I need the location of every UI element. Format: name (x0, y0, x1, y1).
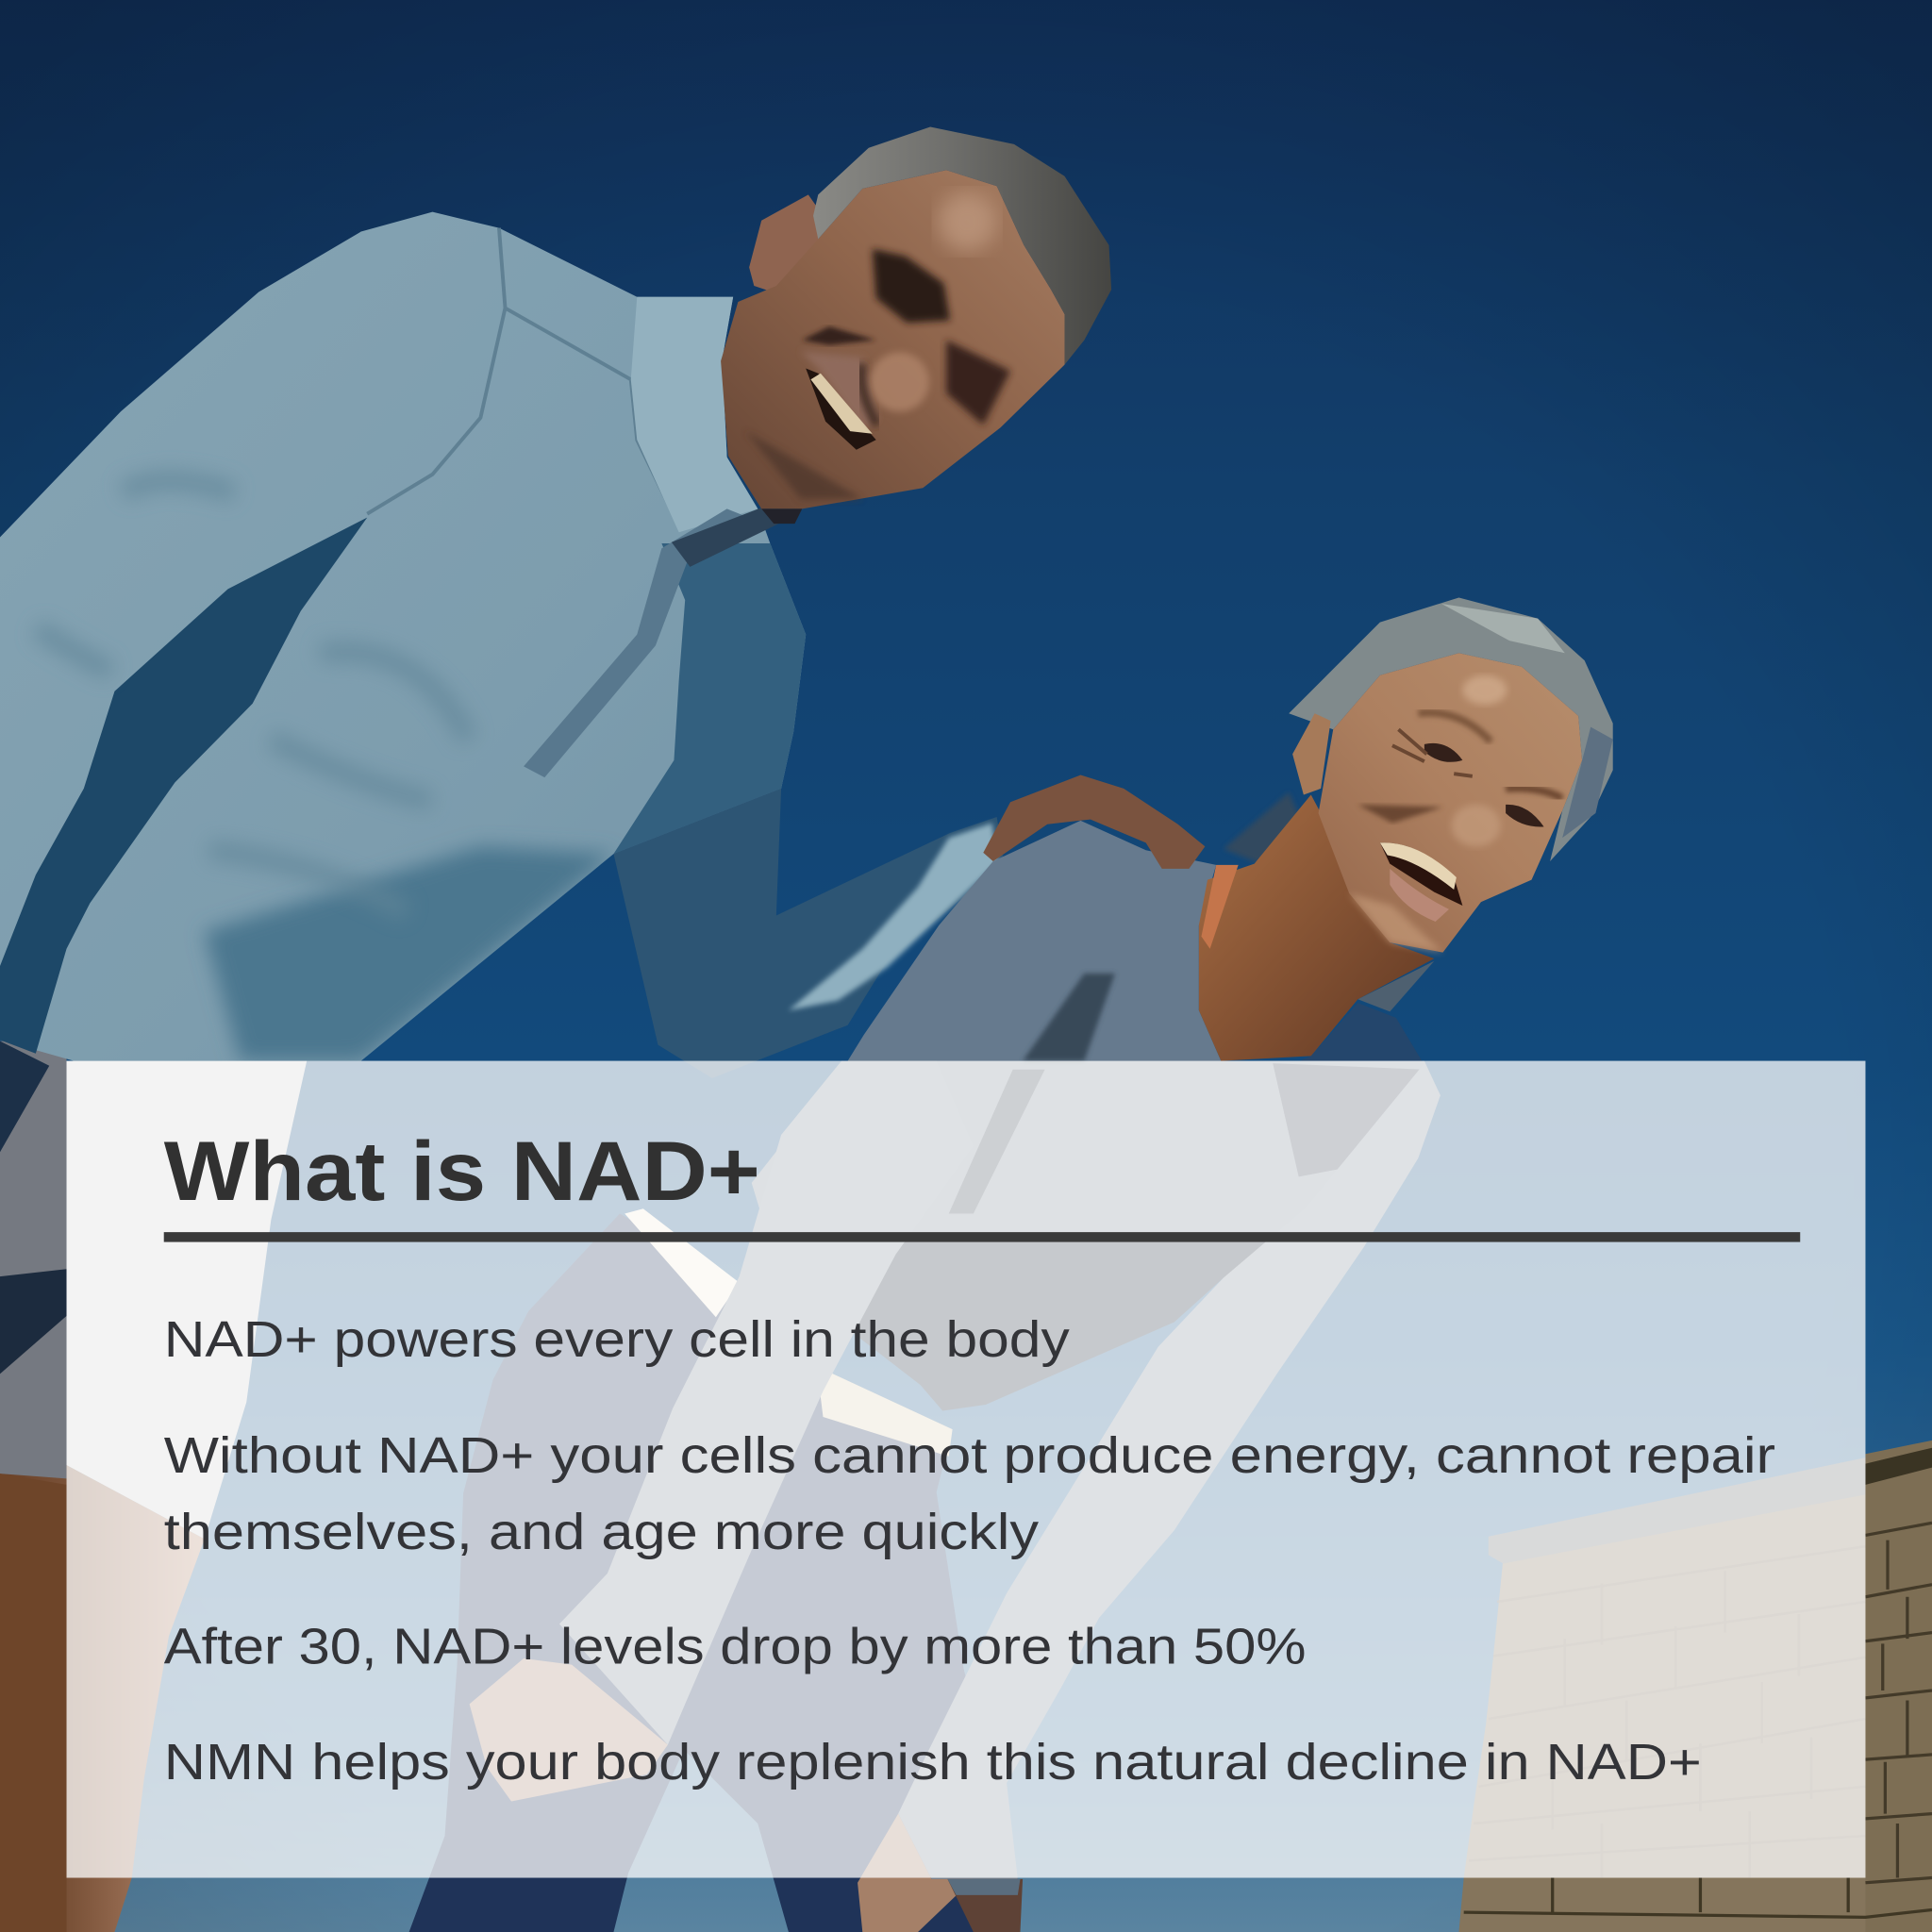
torso shirt (752, 1061, 1441, 1240)
ear (749, 194, 823, 293)
smile with teeth (806, 369, 876, 450)
paragraph: without NAD+: Without NAD+ your cells cannot produce energy, cannot repair (164, 1428, 1775, 1484)
paragraph: after 30: After 30, NAD+ levels drop by more than 50% (164, 1619, 1306, 1674)
man: head (721, 127, 1111, 524)
title underline (164, 1232, 1800, 1242)
panel background (67, 1061, 1865, 1878)
collar (631, 297, 758, 532)
brick wall (1458, 1441, 1932, 1932)
woman: head (1199, 597, 1613, 1061)
man: right sleeve (613, 789, 1004, 1078)
cheek shade (1349, 893, 1442, 953)
info panel (67, 1061, 1865, 1878)
right eye socket (946, 340, 1010, 425)
ear (1292, 713, 1331, 794)
woman: leggings (409, 1208, 1018, 1932)
hair (813, 127, 1111, 365)
paragraph: NMN: NMN helps your body replenish this natural decline in NAD+ (164, 1735, 1702, 1790)
man: legs and shorts (0, 1041, 307, 1932)
eye wrinkles (1392, 729, 1473, 776)
chin shade (745, 431, 862, 499)
upper lip (801, 351, 877, 431)
hair (1289, 597, 1613, 861)
torso shadow under arm (0, 518, 367, 1054)
nose shadow (802, 326, 876, 345)
brows (1418, 713, 1491, 741)
sleeve highlight (789, 823, 998, 1010)
eyes (1424, 743, 1462, 762)
zip placket (524, 508, 764, 777)
nose (870, 353, 929, 411)
chest shadow (613, 543, 806, 854)
torso dark underside (758, 1240, 1364, 1411)
nose (1452, 805, 1501, 846)
face (721, 170, 1064, 508)
forehead highlight (1462, 675, 1507, 705)
armpit shadow (1023, 974, 1115, 1061)
near arm sleeve (559, 1061, 974, 1744)
face (1319, 653, 1582, 953)
far arm sleeve (898, 1063, 1441, 1879)
folds (37, 480, 468, 912)
man: torso shirt (0, 212, 806, 1061)
forehead highlight (938, 192, 997, 251)
paragraph: without NAD+: themselves, and age more quickly (164, 1505, 1039, 1560)
shoulder seam (367, 228, 679, 526)
laughing mouth (1380, 842, 1462, 906)
man: hand on shoulder (983, 775, 1205, 869)
lower torso shade (205, 846, 613, 1061)
left hand (470, 1658, 668, 1802)
nose shadow (1357, 805, 1442, 823)
paragraph: without NAD+ (164, 1428, 1775, 1560)
brow and left eye socket (873, 249, 950, 323)
woman: shoulder and upper shirt (848, 821, 1422, 1061)
woman: lower shirt and arms (470, 1061, 1441, 1932)
title: What is NAD+ (164, 1124, 760, 1218)
neck (1199, 794, 1434, 1061)
right hand (858, 1814, 974, 1932)
paragraph: NAD+ powers: NAD+ powers every cell in the body (164, 1312, 1070, 1368)
torso side shadow (1273, 1063, 1424, 1176)
dark far shoulder (1300, 1003, 1422, 1061)
ponytail (1224, 792, 1308, 864)
